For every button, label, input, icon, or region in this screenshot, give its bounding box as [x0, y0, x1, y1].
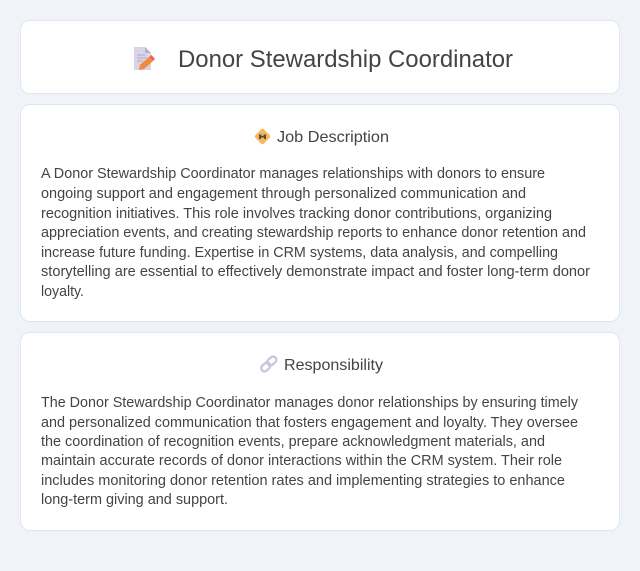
heading: job description: Job Description — [277, 129, 389, 146]
icon: chain link — [260, 355, 278, 373]
title: Donor Stewardship Coordinator — [178, 46, 513, 73]
text block: job description: storytelling are essential to effectively demonstrate impact and foster long-term donor — [41, 264, 590, 280]
text block: responsibility: and personalized communication that fosters engagement and loyalty. They oversee — [41, 415, 578, 431]
text block: responsibility: The Donor Stewardship Coordinator manages donor relationships by ensuring timely — [41, 395, 579, 411]
text block: job description: ongoing support and engagement through personalized communication and — [41, 186, 526, 202]
icon: document with pencil — [134, 47, 155, 70]
text block: job description: increase future funding. Expertise in CRM systems, data analysis, and compelling — [41, 245, 558, 261]
text block: responsibility: includes monitoring donor retention rates and implementing strategies to enhance — [41, 473, 565, 489]
text block: job description: recognition initiatives. This role involves tracking donor contributions, organizing — [41, 206, 552, 222]
text block: responsibility: the coordination of recognition events, prepare acknowledgment materials, and — [41, 434, 545, 450]
text block: responsibility: long-term giving and support. — [41, 492, 228, 508]
text block: job description: A Donor Stewardship Coordinator manages relationships with donors to ensure — [41, 166, 545, 182]
text block: responsibility: maintain accurate records of donor interactions within the CRM system. Their role — [41, 453, 562, 469]
icon: orange diamond — [254, 128, 270, 144]
text block: job description: appreciation events, and creating stewardship reports to enhance donor retention and — [41, 225, 586, 241]
text block: job description: loyalty. — [41, 284, 84, 300]
panel: responsibility card — [20, 332, 620, 531]
panel: job description card — [20, 104, 620, 322]
heading: responsibility: Responsibility — [284, 357, 383, 374]
panel: title card — [20, 20, 620, 94]
